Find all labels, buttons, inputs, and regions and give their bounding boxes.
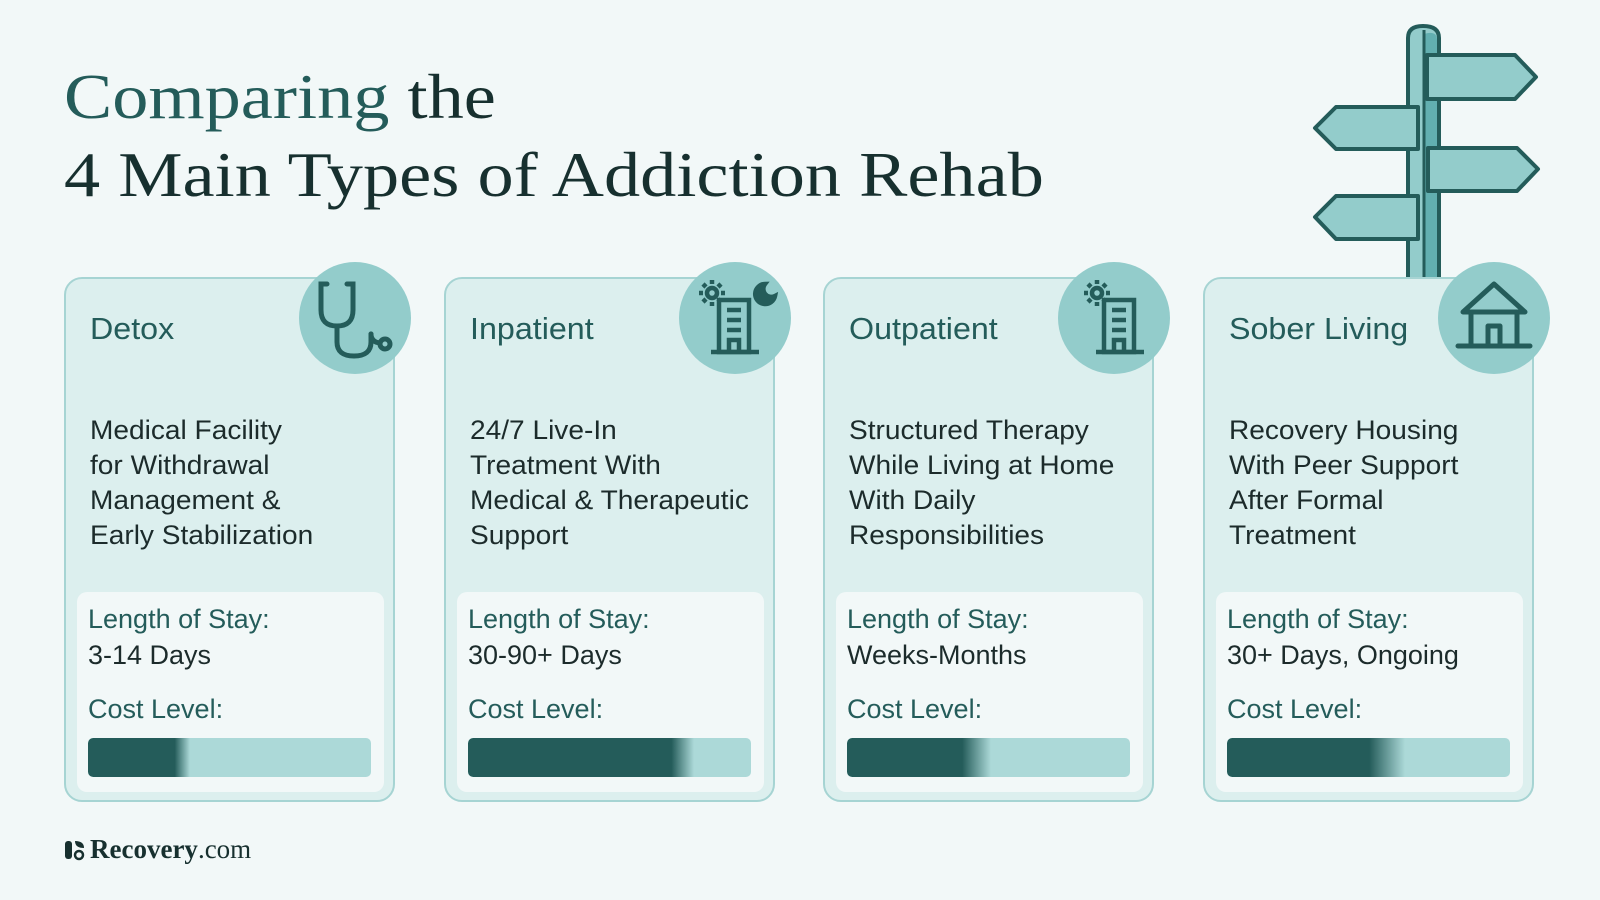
logo <box>65 834 251 864</box>
icon: signpost <box>1312 24 1540 277</box>
text: outpatient description: Responsibilities <box>849 520 1044 550</box>
text: inpatient description <box>470 415 749 550</box>
heading: detox: Detox <box>90 311 174 346</box>
info box: inpatient <box>457 592 764 792</box>
bar: inpatient cost <box>468 738 751 777</box>
info box: outpatient <box>836 592 1143 792</box>
bar: sober living cost <box>1227 738 1510 777</box>
title <box>64 61 1044 210</box>
bar: detox cost <box>88 738 371 777</box>
text: detox description: Medical Facility <box>90 415 282 445</box>
panel: outpatient <box>823 277 1154 802</box>
info box: outpatient: Weeks-Months <box>847 640 1027 670</box>
text: sober living description: Recovery Housing <box>1229 415 1458 445</box>
info box: outpatient: Cost Level: <box>847 694 982 724</box>
panel: detox <box>64 277 395 802</box>
panel: inpatient <box>444 277 775 802</box>
text: outpatient description: Structured Therapy <box>849 415 1089 445</box>
text: inpatient description: 24/7 Live-In <box>470 415 617 445</box>
bar: outpatient cost <box>847 738 1130 777</box>
info box: detox <box>77 592 384 792</box>
text: outpatient description <box>849 415 1114 550</box>
icon: building sun <box>1058 262 1170 374</box>
info box: inpatient: Length of Stay: <box>468 604 650 634</box>
info box: sober living: Cost Level: <box>1227 694 1362 724</box>
info box: outpatient: Length of Stay: <box>847 604 1029 634</box>
title: Comparing the <box>64 61 496 132</box>
text: detox description <box>90 415 313 550</box>
text: sober living description <box>1229 415 1458 550</box>
text: sober living description: Treatment <box>1229 520 1356 550</box>
info box: sober living <box>1216 592 1523 792</box>
text: sober living description: With Peer Support <box>1229 450 1458 480</box>
text: detox description: for Withdrawal <box>90 450 269 480</box>
logo: Recovery <box>90 834 198 864</box>
info box: detox: Cost Level: <box>88 694 223 724</box>
text: detox description: Early Stabilization <box>90 520 313 550</box>
info box: sober living: Length of Stay: <box>1227 604 1409 634</box>
title: 4 Main Types of Addiction Rehab <box>64 139 1044 210</box>
info box: sober living: 30+ Days, Ongoing <box>1227 640 1459 670</box>
info box: inpatient: 30-90+ Days <box>468 640 622 670</box>
text: inpatient description: Treatment With <box>470 450 661 480</box>
logo: .com <box>198 834 251 864</box>
text: outpatient description: While Living at Home <box>849 450 1114 480</box>
info box: inpatient: Cost Level: <box>468 694 603 724</box>
icon: building sun moon <box>679 262 791 374</box>
text: sober living description: After Formal <box>1229 485 1383 515</box>
heading: sober living: Sober Living <box>1229 311 1408 346</box>
panel: sober living <box>1203 277 1534 802</box>
info box: detox: 3-14 Days <box>88 640 211 670</box>
text: outpatient description: With Daily <box>849 485 975 515</box>
icon: house <box>1438 262 1550 374</box>
text: detox description: Management & <box>90 485 280 515</box>
icon: stethoscope <box>299 262 411 374</box>
text: inpatient description: Support <box>470 520 568 550</box>
heading: inpatient: Inpatient <box>470 311 594 346</box>
heading: outpatient: Outpatient <box>849 311 998 346</box>
text: inpatient description: Medical & Therapeutic <box>470 485 749 515</box>
info box: detox: Length of Stay: <box>88 604 270 634</box>
